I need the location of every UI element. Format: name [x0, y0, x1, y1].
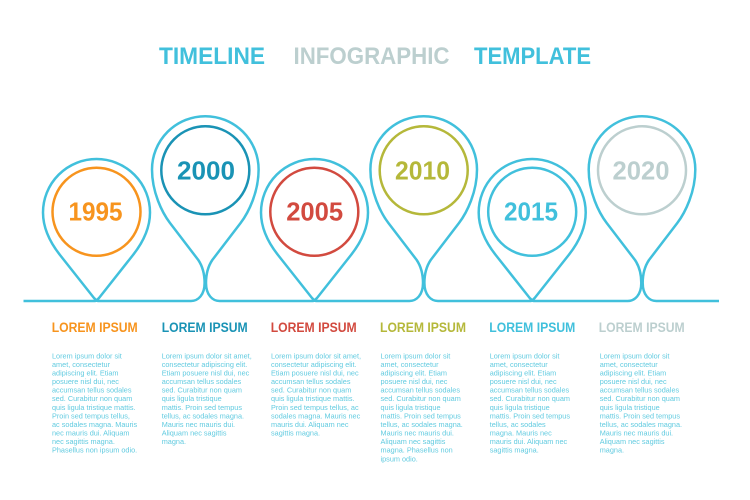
title	[159, 43, 591, 70]
column 1995 text: posuere nisl dui, nec	[52, 377, 119, 386]
year marker 2010: 2010	[395, 155, 450, 185]
column 2010 text: tellus, ac sodales magna.	[380, 420, 463, 429]
column 2010 text: adipiscing elit. Etiam	[380, 368, 447, 378]
column 2015 text: mauris dui. Aliquam nec	[490, 437, 568, 446]
column 2000 text: LOREM IPSUM	[162, 320, 248, 335]
column 2020 text: adipiscing elit. Etiam	[600, 368, 666, 378]
column 2005 text: sed. Curabitur non quam	[271, 386, 351, 395]
column 2005 text: Etiam posuere nisl dui, nec	[271, 368, 359, 378]
column 2010 text: accumsan tellus sodales	[380, 386, 460, 395]
column 2005 text: sodales magna. Mauris nec	[271, 411, 361, 420]
column 1995 text: amet, consectetur	[52, 360, 111, 369]
column 2010 text: posuere nisl dui, nec	[380, 377, 448, 386]
column 2015 text: LOREM IPSUM	[489, 320, 575, 335]
year marker 2000: 2000	[177, 155, 235, 185]
year marker 2005: 2005	[286, 197, 343, 227]
column 2005 text	[271, 320, 361, 438]
year marker 2015: 2015	[504, 197, 558, 227]
column 2010 text: mattis. Proin sed tempus	[380, 411, 461, 420]
column 1995 text: nec mauris dui. Aliquam	[52, 428, 129, 438]
year marker 2015	[488, 168, 576, 256]
column 2010 text: amet, consectetur	[380, 360, 439, 369]
column 1995 text: LOREM IPSUM	[52, 320, 138, 335]
column 2000 text: Aliquam nec sagittis	[162, 428, 227, 438]
title: TEMPLATE	[474, 43, 591, 70]
column 2015 text: accumsan tellus sodales	[490, 386, 570, 395]
year marker 1995: 1995	[68, 197, 122, 227]
column 2015 text: tellus, ac sodales	[490, 420, 546, 429]
column 1995 text: quis ligula tristique mattis.	[52, 403, 136, 412]
column 2020 text: amet, consectetur	[600, 360, 658, 369]
column 2005 text: accumsan tellus sodales	[271, 377, 351, 386]
year marker 2010	[380, 126, 468, 214]
column 2005 text: sagittis magna.	[271, 428, 320, 438]
column 2005 text: mauris dui. Aliquam nec	[271, 420, 349, 429]
column 2015 text: sed. Curabitur non quam	[490, 394, 570, 403]
column 2020 text: Mauris nec mauris dui.	[600, 428, 673, 438]
column 2005 text: Proin sed tempus tellus, ac	[271, 403, 359, 412]
column 2000 text: mattis. Proin sed tempus	[162, 403, 242, 412]
year marker 1995	[52, 168, 140, 256]
column 2000 text: tellus, ac sodales magna.	[162, 411, 244, 420]
column 1995 text: Phasellus non ipsum odio.	[52, 446, 137, 455]
column 2010 text: LOREM IPSUM	[380, 320, 466, 335]
column 2010 text: Aliquam nec sagittis	[380, 437, 446, 446]
year marker 2020	[598, 126, 686, 214]
column 2020 text: quis ligula tristique	[600, 403, 660, 412]
column 2020 text	[599, 320, 685, 455]
column 2000 text: sed. Curabitur non quam	[162, 386, 242, 395]
column 2015 text	[489, 320, 575, 455]
column 2015 text: magna. Mauris nec	[490, 428, 552, 438]
column 1995 text: Proin sed tempus tellus,	[52, 411, 130, 420]
timeline line forming six map pins	[24, 116, 719, 301]
column 2000 text: Mauris nec mauris dui.	[162, 420, 235, 429]
column 2020 text: accumsan tellus sodales	[600, 386, 680, 395]
column 2010 text: quis ligula tristique	[380, 403, 441, 412]
column 2020 text: posuere nisl dui, nec	[600, 377, 667, 386]
column 2000 text: Lorem ipsum dolor sit amet,	[162, 351, 252, 360]
column 2005 text: Lorem ipsum dolor sit amet,	[271, 351, 361, 360]
column 2015 text: posuere nisl dui, nec	[490, 377, 557, 386]
column 2015 text: mattis. Proin sed tempus	[490, 411, 570, 420]
column 2000 text: accumsan tellus sodales	[162, 377, 242, 386]
column 2005 text: quis ligula tristique mattis.	[271, 394, 355, 403]
column 2015 text: Lorem ipsum dolor sit	[490, 351, 559, 360]
column 2005 text: consectetur adipiscing elit.	[271, 360, 357, 369]
column 2015 text: adipiscing elit. Etiam	[490, 368, 556, 378]
column 1995 text: sed. Curabitur non quam	[52, 394, 132, 403]
column 2000 text: consectetur adipiscing elit.	[162, 360, 247, 369]
column 1995 text: accumsan tellus sodales	[52, 386, 132, 395]
column 2010 text: Mauris nec mauris dui.	[380, 428, 454, 438]
title: TIMELINE	[159, 43, 265, 70]
column 2015 text: sagittis magna.	[490, 446, 539, 455]
column 2020 text: Lorem ipsum dolor sit	[600, 351, 669, 360]
column 2000 text: magna.	[162, 437, 186, 446]
column 1995 text	[52, 320, 138, 455]
column 2020 text: mattis. Proin sed tempus	[600, 411, 680, 420]
column 1995 text: ac sodales magna. Mauris	[52, 420, 138, 429]
column 2020 text: magna.	[600, 446, 624, 455]
column 1995 text: adipiscing elit. Etiam	[52, 368, 119, 378]
column 2015 text: amet, consectetur	[490, 360, 548, 369]
column 2000 text	[162, 320, 252, 446]
column 2000 text: quis ligula tristique	[162, 394, 222, 403]
year marker 2020: 2020	[612, 155, 670, 185]
column 2010 text: sed. Curabitur non quam	[380, 394, 461, 403]
column 2020 text: LOREM IPSUM	[599, 320, 685, 335]
column 2010 text: Lorem ipsum dolor sit	[380, 351, 450, 360]
column 2010 text: ipsum odio.	[380, 454, 418, 463]
column 1995 text: nec sagittis magna.	[52, 437, 115, 446]
column 2020 text: Aliquam nec sagittis	[600, 437, 665, 446]
column 2000 text: Etiam posuere nisl dui, nec	[162, 368, 250, 378]
column 2010 text	[380, 320, 466, 463]
title: INFOGRAPHIC	[294, 43, 450, 70]
column 1995 text: Lorem ipsum dolor sit	[52, 351, 122, 360]
column 2005 text: LOREM IPSUM	[271, 320, 357, 335]
column 2010 text: magna. Phasellus non	[380, 446, 453, 455]
year marker 2005	[270, 168, 358, 256]
column 2015 text: quis ligula tristique	[490, 403, 550, 412]
column 2020 text: tellus, ac sodales magna.	[600, 420, 682, 429]
column 2020 text: sed. Curabitur non quam	[600, 394, 680, 403]
year marker 2000	[161, 126, 249, 214]
